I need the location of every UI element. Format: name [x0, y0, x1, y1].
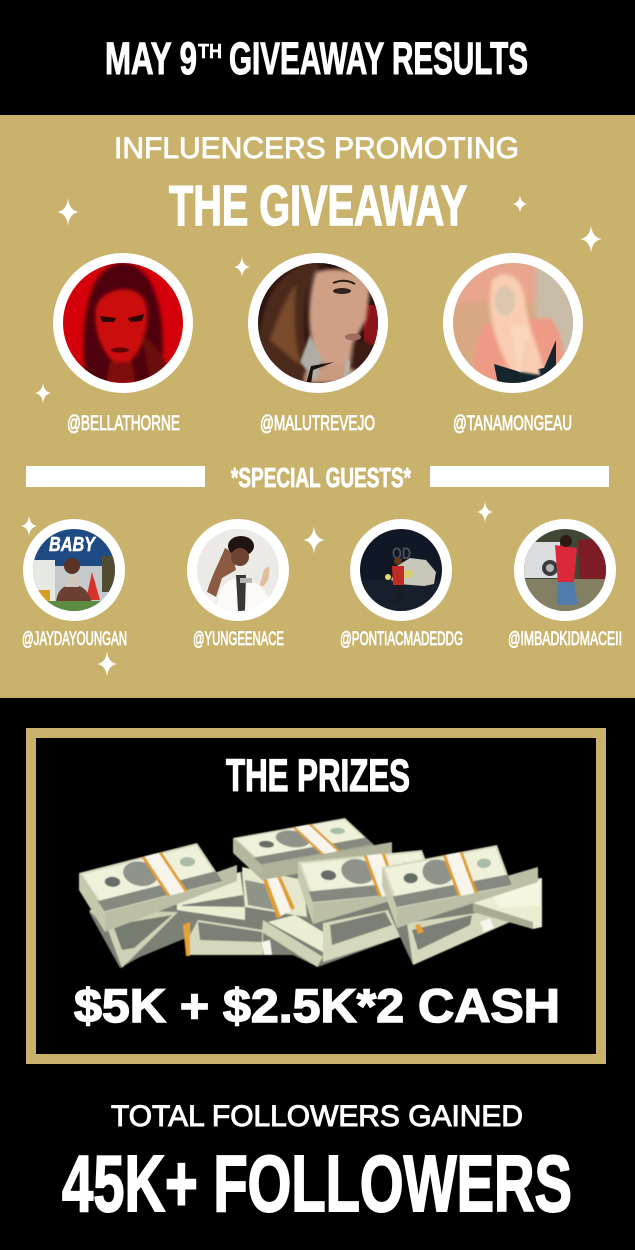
- handle: bellathorne: @BELLATHORNE: [67, 412, 180, 435]
- title: MAY 9: [105, 33, 197, 84]
- divider right bar: [430, 466, 609, 487]
- illustration: stacks of cash: [79, 818, 542, 968]
- avatar: imbadkidmaceii: [514, 519, 616, 621]
- divider left bar: [26, 466, 205, 487]
- stack: centre: [298, 862, 313, 924]
- avatar: malutrevejo: [248, 253, 388, 393]
- title: [105, 33, 528, 84]
- avatar: yungeenace: [187, 519, 289, 621]
- avatar: tanamongeau: [443, 253, 583, 393]
- title: TH: [198, 41, 222, 63]
- avatar: bellathorne: [53, 253, 193, 393]
- heading: special guests: *SPECIAL GUESTS*: [231, 462, 411, 493]
- handle: tanamongeau: @TANAMONGEAU: [453, 412, 572, 435]
- handle: malutrevejo: @MALUTREVEJO: [260, 412, 375, 435]
- lower layer: [89, 860, 542, 968]
- prize amount: $5K + $2.5K*2 CASH: [74, 979, 560, 1032]
- avatar: pontiacmadeddg: OD: [392, 544, 411, 563]
- avatar: pontiacmadeddg: [350, 519, 452, 621]
- stack: left: [79, 873, 105, 932]
- panel: prizes frame: [31, 733, 601, 1059]
- heading: the giveaway: THE GIVEAWAY: [169, 174, 467, 238]
- heading: influencers promoting: INFLUENCERS PROMOTING: [114, 132, 519, 165]
- avatar: jaydayoungan: [23, 519, 125, 621]
- handle: pontiacmadeddg: @PONTIACMADEDDG: [340, 629, 463, 650]
- heading: total followers gained: TOTAL FOLLOWERS GAINED: [111, 1100, 523, 1133]
- heading: the prizes: THE PRIZES: [226, 750, 410, 801]
- handle: yungeenace: @YUNGEENACE: [193, 629, 284, 650]
- stack: right: [382, 867, 397, 928]
- panel: influencers: [0, 115, 635, 698]
- handle: jaydayoungan: @JAYDAYOUNGAN: [22, 629, 127, 650]
- avatar: jaydayoungan: BABY: [49, 534, 96, 556]
- sparkles: [21, 195, 602, 677]
- back stack: [233, 838, 262, 880]
